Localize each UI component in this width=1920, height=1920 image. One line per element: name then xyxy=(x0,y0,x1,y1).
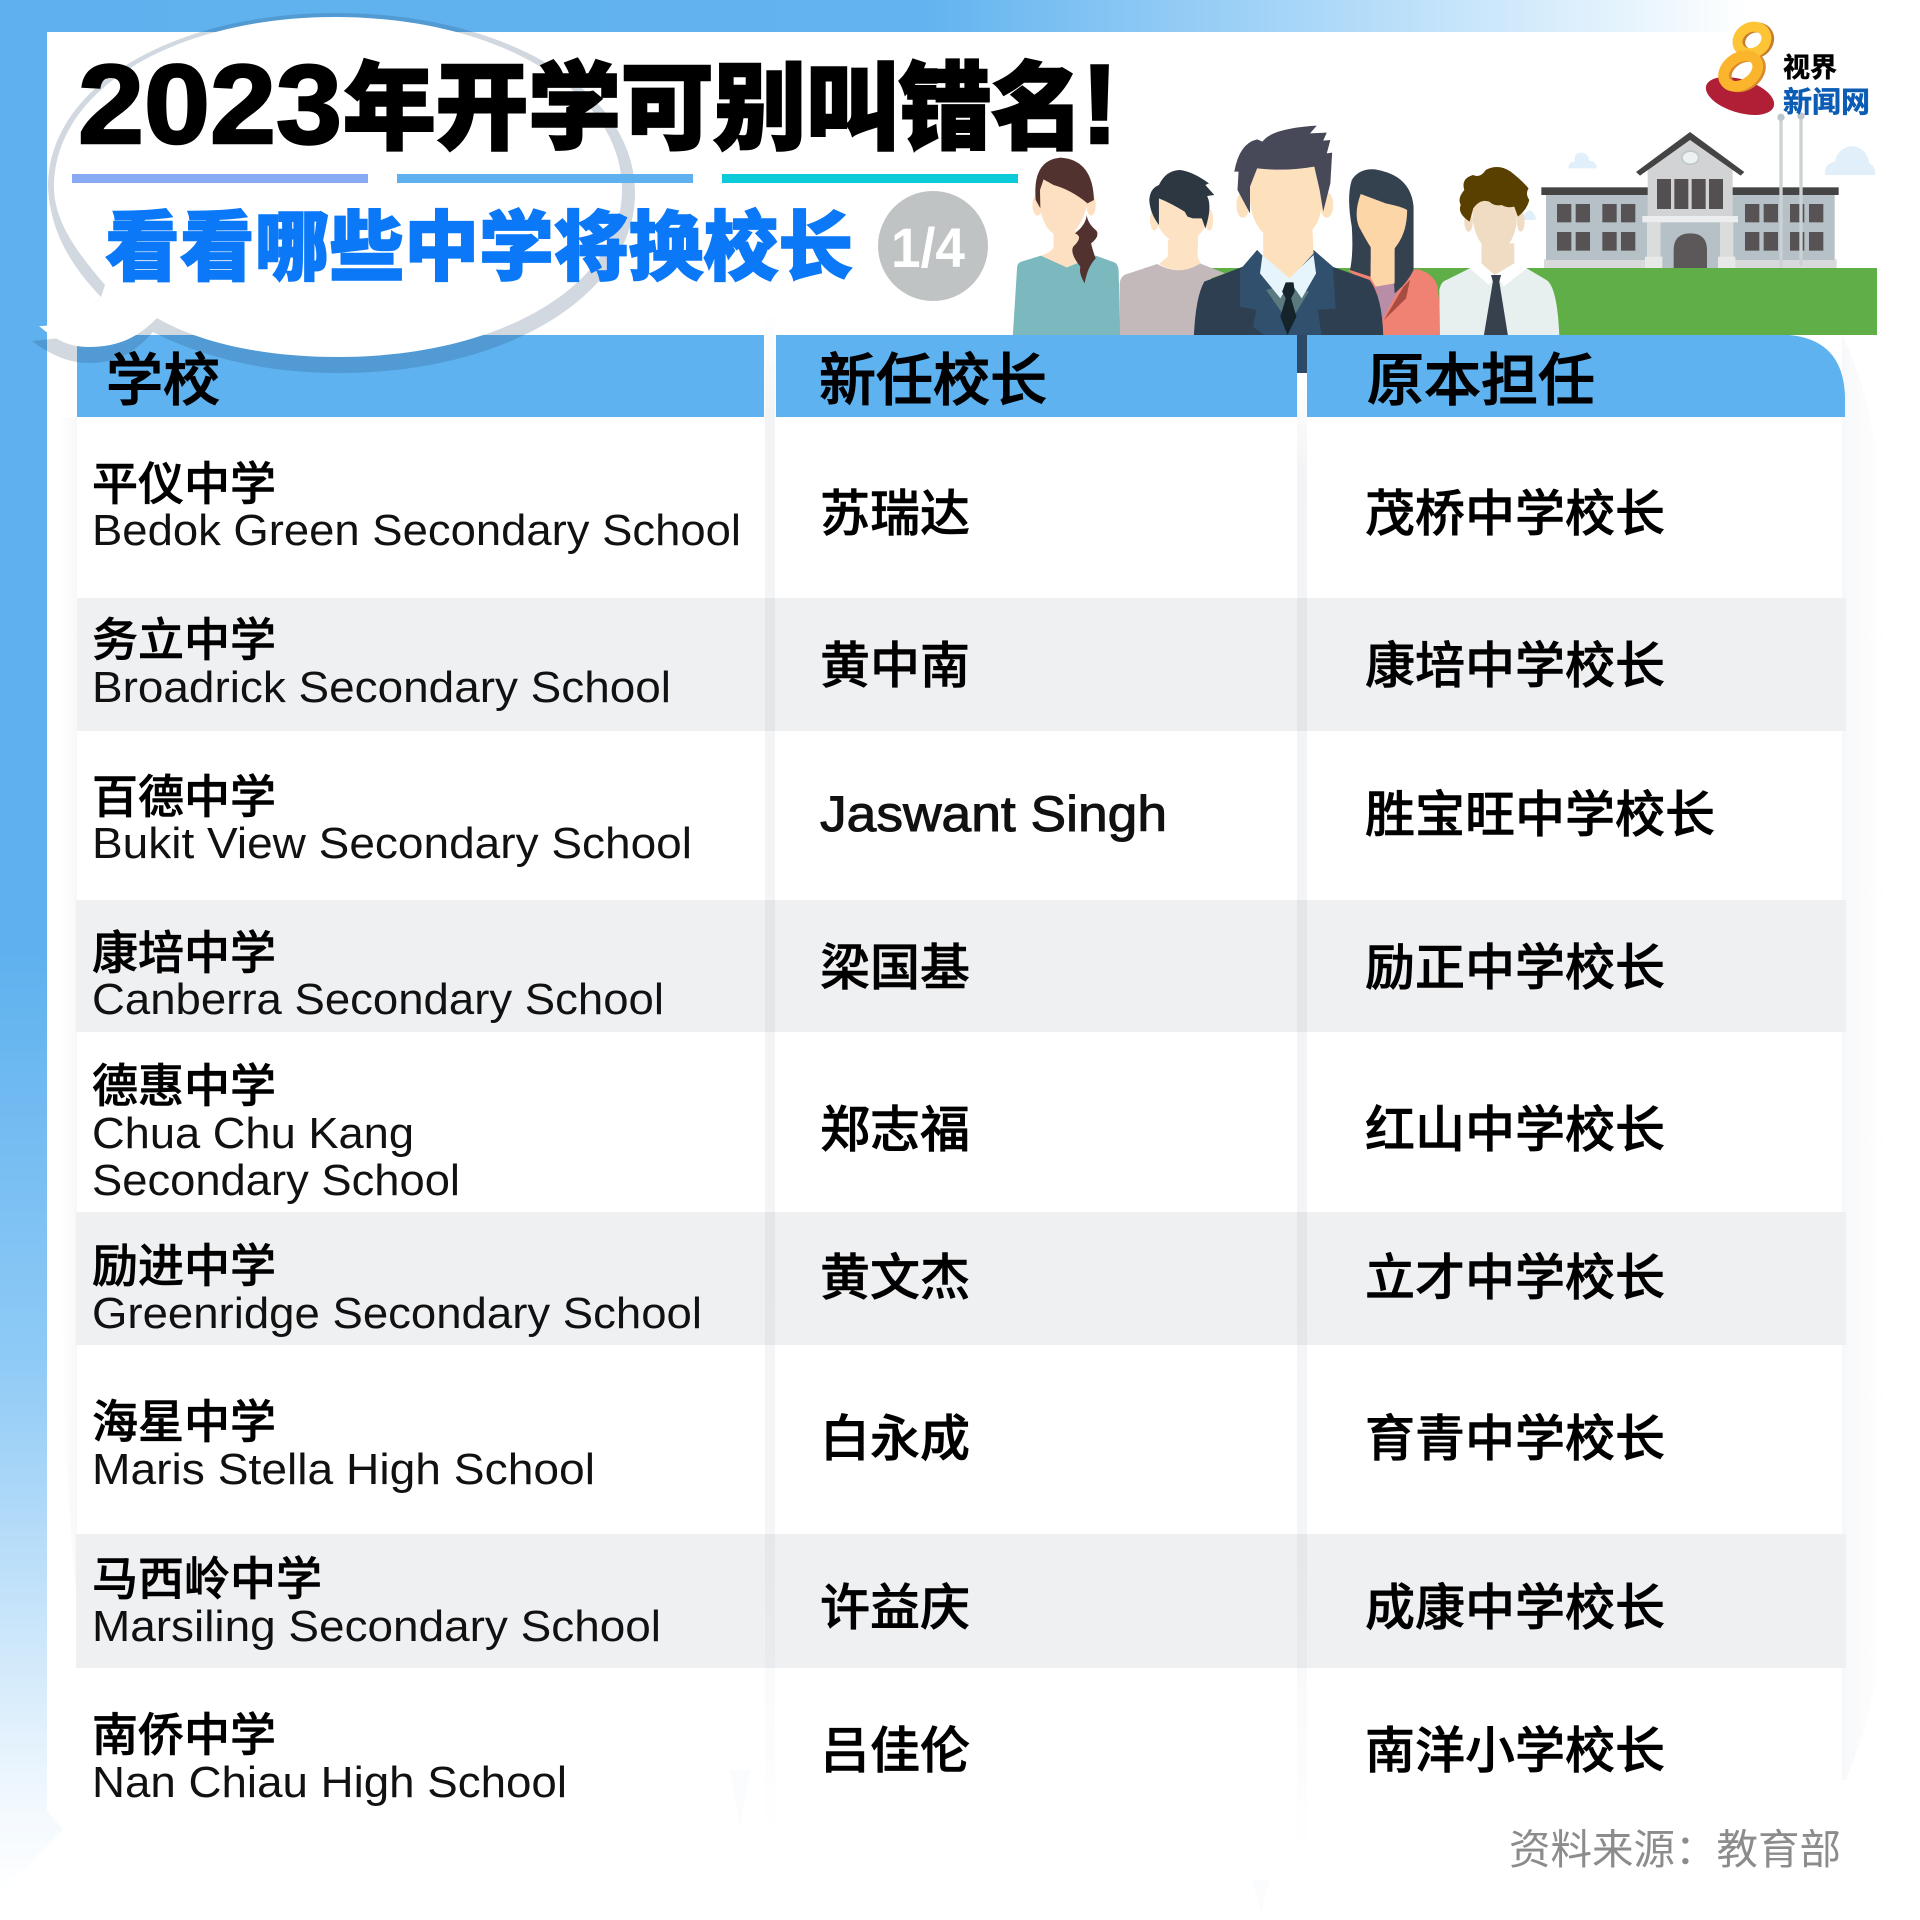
row 3: 胜宝旺中学校长 xyxy=(1365,787,1715,843)
row 4: 梁国基 xyxy=(820,940,970,996)
row 5: Secondary School xyxy=(92,1156,460,1205)
row 5: Chua Chu Kang xyxy=(92,1109,414,1158)
row 9: 吕佳伦 xyxy=(820,1723,970,1779)
bubble shadow xyxy=(32,13,635,373)
subtitle: 看看哪些中学将换校长 xyxy=(105,206,853,291)
row 3 xyxy=(92,771,1715,868)
title xyxy=(78,42,1118,167)
row 8: 马西岭中学 xyxy=(92,1553,322,1605)
title: ! xyxy=(1081,42,1118,167)
person: woman in teal xyxy=(1013,158,1120,335)
row 5 xyxy=(92,1060,1665,1205)
row 4 xyxy=(92,927,1665,1024)
row 3: 百德中学 xyxy=(92,771,276,823)
row 6 xyxy=(92,1240,1665,1338)
row 5: 德惠中学 xyxy=(92,1060,276,1112)
row 1: Bedok Green Secondary School xyxy=(92,506,741,555)
person: man in grey sweater xyxy=(1120,170,1225,335)
row 8: 许益庆 xyxy=(820,1580,970,1636)
flagpoles xyxy=(1777,112,1805,267)
title accent lines xyxy=(72,174,1018,183)
row 1 xyxy=(92,458,1665,555)
table shadow stripes xyxy=(60,335,1885,1912)
illustration: school building xyxy=(1523,112,1875,268)
table header bands xyxy=(77,335,1845,417)
logo text: 新闻网 xyxy=(1783,86,1870,119)
row 2: 黄中南 xyxy=(820,638,970,694)
row 7: 白永成 xyxy=(820,1411,970,1467)
logo: 8 视界新闻网 xyxy=(1701,22,1779,122)
logo text: 视界 xyxy=(1783,53,1837,83)
row 2: 康培中学校长 xyxy=(1365,638,1665,694)
table header labels: 新任校长 xyxy=(819,349,1047,413)
logo gold 8 xyxy=(1718,22,1774,93)
row 9: Nan Chiau High School xyxy=(92,1758,567,1807)
row 8: 成康中学校长 xyxy=(1365,1580,1665,1636)
person: woman in coral jacket xyxy=(1348,169,1443,335)
row 3: Bukit View Secondary School xyxy=(92,819,692,868)
row 2: Broadrick Secondary School xyxy=(92,663,671,712)
row 2 xyxy=(92,614,1665,712)
speech bubble behind title xyxy=(32,13,635,373)
person: man in navy suit xyxy=(1194,126,1383,335)
central tower xyxy=(1648,140,1733,268)
page badge 1/4: 1/4 xyxy=(891,216,965,279)
door xyxy=(1674,233,1707,268)
source note: 资料来源：教育部 xyxy=(1509,1826,1841,1873)
wing roof xyxy=(1541,187,1839,195)
table header labels: 原本担任 xyxy=(1367,349,1595,413)
title: 2023 xyxy=(78,42,342,167)
row 6: Greenridge Secondary School xyxy=(92,1289,702,1338)
logo red base xyxy=(1701,70,1779,122)
row 9 xyxy=(92,1709,1665,1807)
table row backgrounds xyxy=(76,598,1846,1668)
row 6: 黄文杰 xyxy=(820,1250,970,1306)
row 7: Maris Stella High School xyxy=(92,1445,595,1494)
row 9: 南侨中学 xyxy=(92,1709,276,1761)
row 7: 海星中学 xyxy=(92,1396,276,1448)
row 4: 康培中学 xyxy=(92,927,276,979)
portico xyxy=(1642,216,1738,268)
row 1: 茂桥中学校长 xyxy=(1365,486,1665,542)
green lawn xyxy=(1211,268,1877,335)
title: 年开学可别叫错名 xyxy=(343,56,1084,162)
person: man in white shirt xyxy=(1439,167,1559,335)
row 2: 务立中学 xyxy=(92,614,276,666)
row 1: 平仪中学 xyxy=(92,458,276,510)
column dividers xyxy=(765,313,1307,1853)
row 4: Canberra Secondary School xyxy=(92,975,664,1024)
base plinth xyxy=(1544,259,1837,268)
wing windows xyxy=(1557,204,1823,251)
illustration: five people xyxy=(1013,126,1559,335)
tower windows xyxy=(1657,179,1723,209)
row 4: 励正中学校长 xyxy=(1365,940,1665,996)
row 3: Jaswant Singh xyxy=(820,786,1167,842)
row 9: 南洋小学校长 xyxy=(1365,1723,1665,1779)
table header labels: 学校 xyxy=(106,349,220,413)
logo text xyxy=(1783,53,1870,119)
row 1: 苏瑞达 xyxy=(820,486,970,542)
wings xyxy=(1546,195,1835,260)
row 7: 育青中学校长 xyxy=(1365,1411,1665,1467)
round window xyxy=(1682,151,1699,164)
row 5: 红山中学校长 xyxy=(1365,1102,1665,1158)
row 6: 立才中学校长 xyxy=(1365,1250,1665,1306)
bubble fill xyxy=(39,17,622,357)
row 7 xyxy=(92,1396,1665,1494)
table header labels xyxy=(106,349,1595,413)
row 5: 郑志福 xyxy=(820,1102,970,1158)
row 6: 励进中学 xyxy=(92,1240,276,1292)
page badge 1/4 xyxy=(878,191,988,301)
clouds xyxy=(1523,146,1875,220)
gable roof xyxy=(1636,132,1744,176)
row 8 xyxy=(92,1553,1665,1651)
row 8: Marsiling Secondary School xyxy=(92,1602,661,1651)
